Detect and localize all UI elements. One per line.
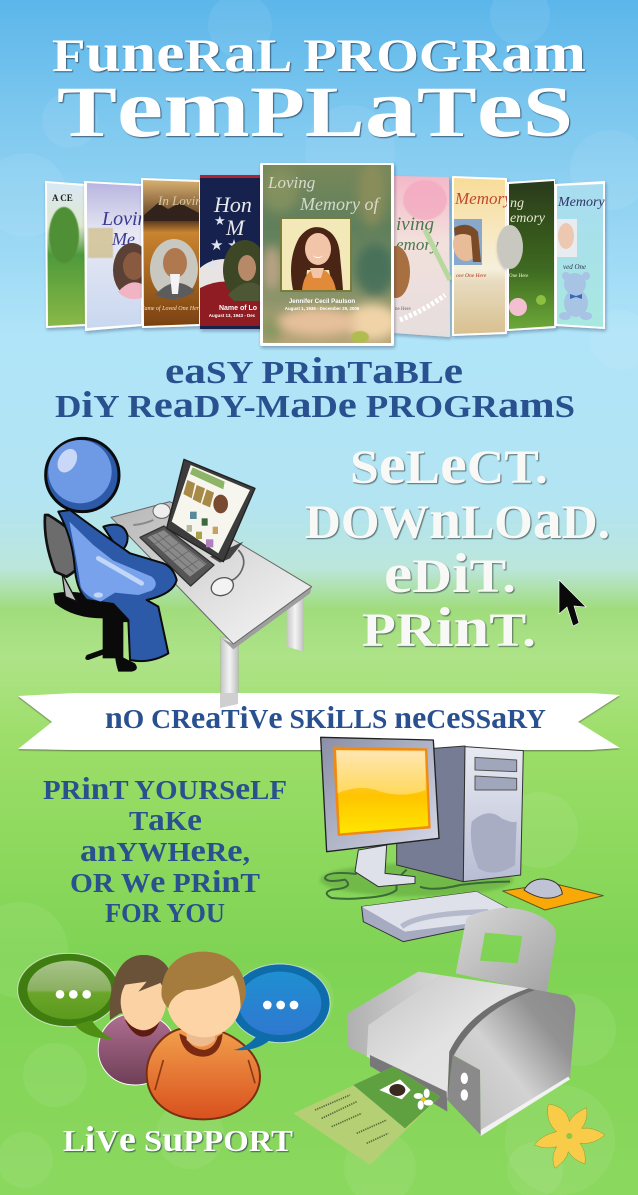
printed memorial program bbox=[293, 1067, 440, 1165]
card: pink tulip bbox=[382, 176, 450, 337]
card: flag: ★ ★ bbox=[210, 238, 241, 254]
card: pink tulip: ne Here bbox=[395, 307, 411, 312]
card: tree lake bbox=[45, 181, 86, 328]
illustration: desktop computer bbox=[320, 737, 603, 942]
title line: Funeral Program: Fune RaL PROGR am bbox=[52, 22, 586, 83]
card: teddy bear bbox=[555, 181, 605, 329]
printer left band bbox=[347, 972, 441, 1056]
card: clouds: Me bbox=[111, 229, 135, 249]
computer tower bbox=[397, 746, 523, 882]
printer base lip bbox=[481, 1077, 570, 1136]
step: Print.: PRinT. bbox=[362, 597, 536, 659]
card: tree lake: A CE bbox=[52, 193, 73, 203]
card: featured memorial program: August 1, 1936 - December 29, 2006 bbox=[285, 306, 360, 311]
printer front panel bbox=[370, 1055, 481, 1135]
printer right cover bbox=[453, 988, 575, 1135]
card: flag: M bbox=[225, 215, 246, 240]
template cards fan bbox=[45, 163, 605, 346]
step: Edit.: eDiT. bbox=[384, 543, 516, 605]
laptop stand and screen bbox=[167, 459, 255, 563]
subtitle line 1: eaSY PR inTaBLe bbox=[165, 351, 463, 392]
card: teddy bear: ved One bbox=[563, 263, 586, 271]
shadow under computer bbox=[320, 863, 513, 897]
mouse pad and mouse bbox=[503, 879, 603, 910]
desk top bbox=[111, 502, 312, 649]
line: Anywhere,: anYWHeRe, bbox=[80, 833, 250, 868]
woman figure bbox=[98, 955, 175, 1085]
illustration: person at desk bbox=[45, 438, 312, 705]
card: beach bbox=[139, 178, 209, 328]
card: flag: ★ bbox=[206, 258, 219, 274]
card: flag bbox=[200, 175, 267, 329]
icon: yellow flower bbox=[534, 1104, 605, 1168]
line: Print Yourself: PRinT YOURS eLF bbox=[43, 771, 287, 806]
card: beach: In Loving bbox=[157, 193, 209, 208]
card: flag: Hon bbox=[213, 192, 252, 217]
paper holder bbox=[456, 908, 556, 993]
illustration: printer with program bbox=[293, 908, 605, 1168]
icon: mouse cursor bbox=[559, 580, 586, 626]
card: lotus bbox=[497, 179, 556, 331]
card: girl on sand: ove One Here bbox=[456, 273, 487, 279]
ribbon banner bbox=[18, 693, 620, 750]
printer dark strip bbox=[447, 988, 535, 1103]
chair bbox=[45, 515, 143, 672]
cables bbox=[325, 870, 510, 899]
figure body bbox=[58, 510, 177, 661]
card: lotus: ng bbox=[510, 196, 524, 211]
line: Take: TaKe bbox=[129, 802, 202, 837]
man figure bbox=[147, 952, 260, 1119]
mouse left and cable bbox=[133, 504, 244, 599]
keyboard bbox=[140, 526, 214, 586]
live support label: LiVe SuPPORT bbox=[63, 1119, 293, 1159]
step: Select.: SeLeCT. bbox=[350, 434, 548, 496]
monitor bbox=[321, 737, 439, 852]
card: pink tulip: iving bbox=[396, 214, 434, 235]
desk legs bbox=[221, 593, 304, 705]
figure head bbox=[46, 438, 119, 512]
illustration: live support people bbox=[18, 952, 330, 1119]
card: lotus: One Here bbox=[509, 274, 529, 279]
banner text: nO CReaTiVe SKiLLS neCeSSaRY bbox=[105, 700, 546, 735]
card: pink tulip: emory bbox=[396, 235, 439, 254]
card: flag: August 13, 1943 - Dec bbox=[209, 313, 256, 318]
card: clouds: Lovin bbox=[101, 208, 148, 230]
card: featured memorial program bbox=[258, 163, 398, 346]
card: featured memorial program: Jennifer Cecil Paulson bbox=[289, 298, 355, 305]
card: featured memorial program: Memory of bbox=[299, 194, 381, 214]
card: girl on sand bbox=[452, 176, 512, 336]
printer center cover bbox=[367, 975, 528, 1098]
card: beach: Name of Loved One Here bbox=[139, 305, 202, 312]
speech bubble tails bbox=[75, 1020, 270, 1050]
blue speech bubble bbox=[230, 964, 330, 1043]
green speech bubble bbox=[18, 953, 119, 1027]
card: teddy bear: Memory bbox=[557, 195, 605, 210]
monitor stand bbox=[355, 845, 415, 887]
card: girl on sand: Memory bbox=[454, 189, 512, 208]
subtitle line 2: DiY ReaDY-M aDe PROGR amS bbox=[55, 385, 575, 426]
step: Download.: DOWnLOaD. bbox=[305, 489, 610, 551]
title line: Templates: Tem PL aTeS bbox=[57, 63, 573, 155]
card: flag: ★ bbox=[214, 213, 226, 228]
card: featured memorial program: Loving bbox=[267, 173, 315, 192]
card: clouds bbox=[84, 181, 151, 331]
line: or we print: OR We PRinT bbox=[70, 864, 260, 899]
card: lotus: emory bbox=[510, 211, 546, 226]
line: for you: FOR YOU bbox=[105, 898, 225, 928]
card: flag: Name of Lo bbox=[219, 305, 257, 312]
keyboard bbox=[362, 892, 523, 942]
